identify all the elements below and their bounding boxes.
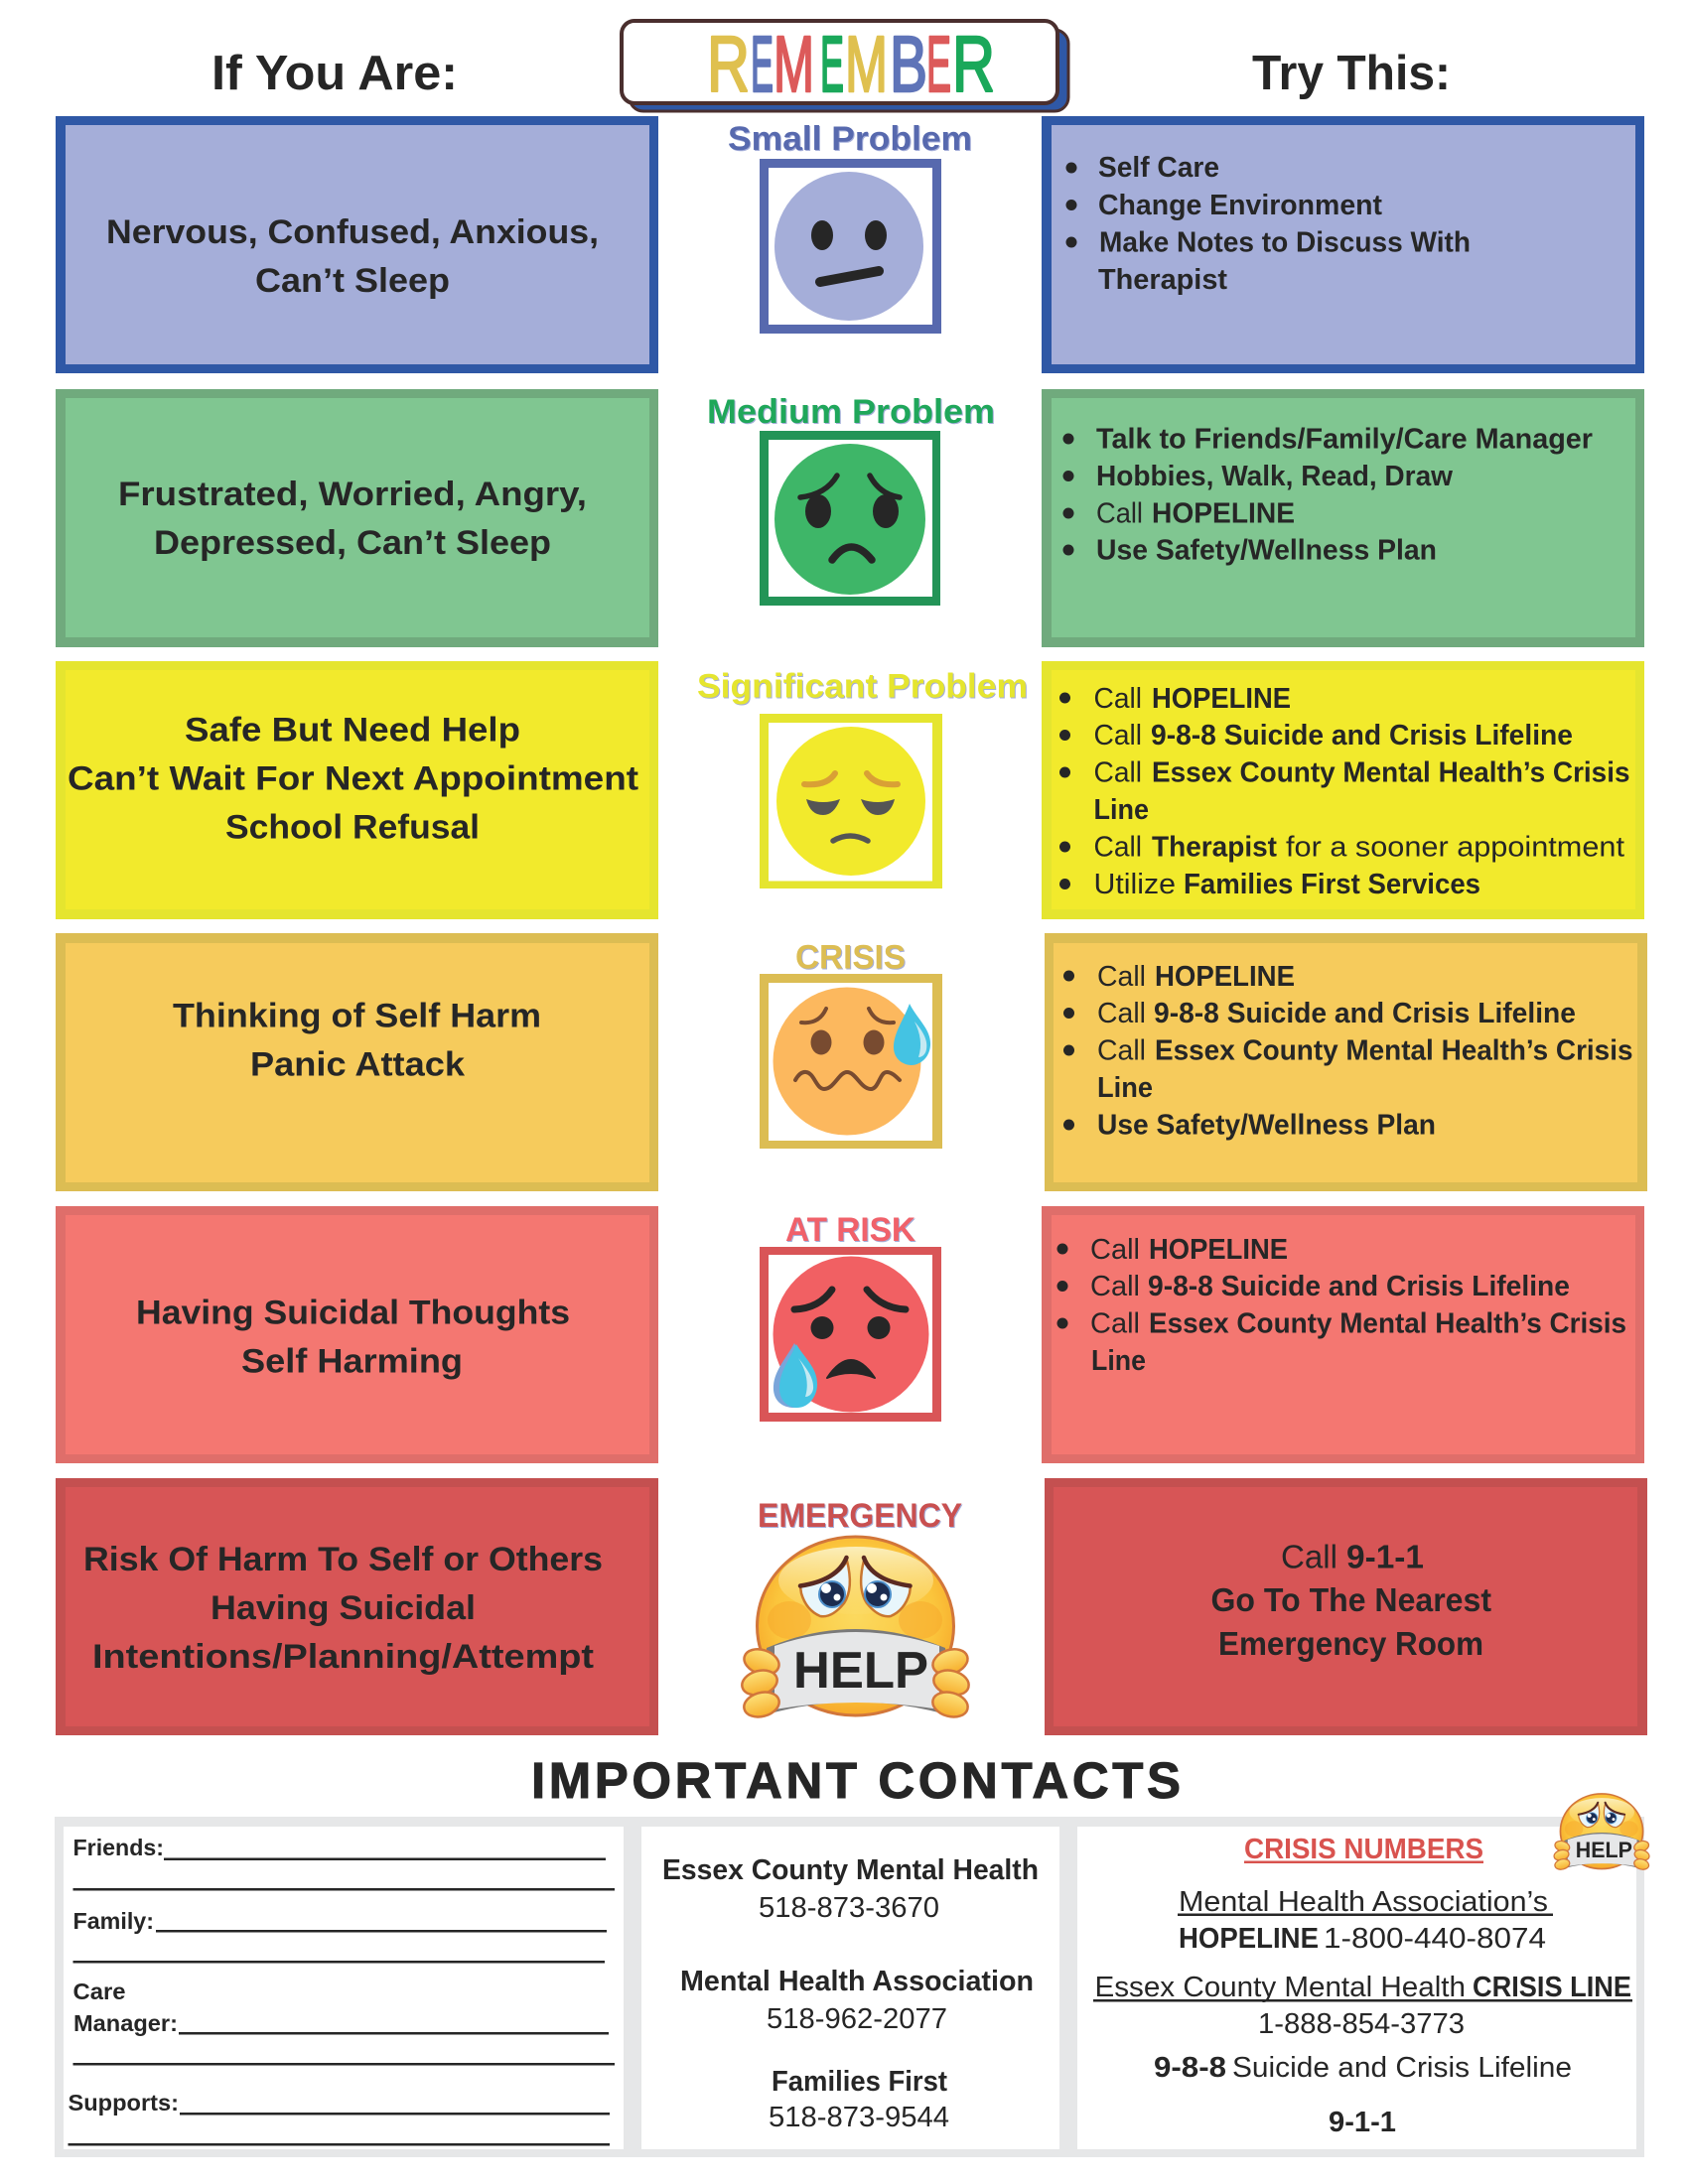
hotline: 9-8-8: 9-8-8	[1154, 2052, 1226, 2084]
field: care manager: Manager:	[73, 2010, 178, 2036]
banner title letters: R	[707, 20, 750, 108]
feelings text: Intentions/Planning/Attempt	[92, 1638, 594, 1676]
heading: Crisis Numbers: CRISIS NUMBERS	[1244, 1834, 1483, 1865]
contact: Families First: Families First	[772, 2066, 947, 2098]
feelings text	[173, 997, 541, 1084]
panel: emergency feelings	[56, 1478, 658, 1735]
action list: Call	[1096, 498, 1143, 530]
icon: neutral face	[760, 159, 941, 334]
feelings text: Can’t Sleep	[255, 262, 450, 300]
action list: Therapist	[1152, 832, 1277, 864]
contact: Families First: 518-873-9544	[769, 2102, 949, 2133]
panel: at risk feelings	[56, 1206, 658, 1463]
action list: HOPELINE	[1149, 1234, 1288, 1266]
icon: small help emoji	[1553, 1794, 1650, 1871]
icon: worried face	[760, 431, 940, 606]
feelings text	[136, 1295, 570, 1380]
field: care manager	[73, 1979, 615, 2065]
label: Significant Problem: Significant Problem	[697, 667, 1028, 705]
action list	[1056, 1234, 1626, 1377]
action list: HOPELINE	[1155, 961, 1295, 993]
action list: for a sooner appointment	[1286, 832, 1624, 864]
hotline: Essex County Crisis Line: 1-888-854-3773	[1258, 2008, 1465, 2040]
action list: Call	[1090, 1234, 1140, 1266]
action list: HOPELINE	[1152, 498, 1295, 530]
action list: Self Care	[1098, 152, 1219, 184]
icon: emoji holding help sign: HELP	[793, 1642, 928, 1700]
action text: Emergency Room	[1218, 1625, 1483, 1662]
feelings text: Nervous, Confused, Anxious,	[106, 213, 599, 251]
field: supports: Supports:	[68, 2090, 179, 2116]
action list: Call	[1094, 756, 1142, 788]
action list: HOPELINE	[1152, 683, 1291, 715]
panel: contacts background	[55, 1817, 1644, 2157]
action text: Go To The Nearest	[1211, 1581, 1491, 1618]
action list: Use Safety/Wellness Plan	[1097, 1110, 1436, 1142]
feelings text: Having Suicidal Thoughts	[136, 1295, 570, 1332]
panel: personal contacts form	[64, 1827, 624, 2149]
feelings text	[68, 711, 638, 846]
action list: Therapist	[1098, 264, 1228, 296]
panel: small problem feelings	[56, 116, 658, 373]
action list: Line	[1091, 1345, 1146, 1377]
panel: significant problem actions	[1042, 661, 1644, 919]
action list: Hobbies, Walk, Read, Draw	[1096, 461, 1454, 492]
contact: Essex County Mental Health	[662, 1854, 1039, 1924]
action list: Call	[1097, 961, 1146, 993]
panel: small problem actions	[1042, 116, 1644, 373]
contact: Mental Health Association: Mental Health Association	[680, 1966, 1034, 1997]
action list: Call	[1094, 720, 1142, 751]
action list: Talk to Friends/Family/Care Manager	[1096, 423, 1593, 455]
action text: Call	[1281, 1539, 1337, 1574]
hotline: 9-1-1: 9-1-1	[1329, 2107, 1396, 2138]
panel: medium problem actions	[1042, 389, 1644, 647]
feelings text	[106, 213, 599, 300]
icon: distressed face with tear	[760, 1247, 941, 1422]
hotline: Essex County Crisis Line: Essex County Mental Health	[1094, 1972, 1466, 2003]
action list: Essex County Mental Health’s Crisis	[1155, 1034, 1632, 1066]
feelings text: Depressed, Can’t Sleep	[154, 524, 551, 562]
feelings text: Risk Of Harm To Self or Others	[83, 1541, 603, 1578]
action list: 9-8-8 Suicide and Crisis Lifeline	[1148, 1271, 1570, 1302]
action list: Line	[1094, 794, 1149, 826]
action list: Use Safety/Wellness Plan	[1096, 534, 1437, 566]
icon: emoji holding help sign	[740, 1537, 971, 1720]
banner: REMEMBER	[622, 20, 1068, 111]
action list	[1063, 961, 1632, 1142]
icon: anxious face with sweat drop	[760, 974, 942, 1149]
feelings text: Safe But Need Help	[185, 711, 520, 749]
panel: significant problem feelings	[56, 661, 658, 919]
hotline: Essex County Crisis Line: CRISIS LINE	[1473, 1972, 1631, 2003]
title: Important Contacts: IMPORTANT CONTACTS	[531, 1752, 1181, 1809]
panel: crisis numbers	[1077, 1827, 1636, 2149]
banner title letters: B	[890, 20, 927, 108]
action list: Line	[1097, 1072, 1153, 1104]
action list	[1062, 423, 1593, 566]
field: care manager: Care	[73, 1979, 125, 2004]
contact: Essex County Mental Health: Essex County Mental Health	[662, 1854, 1039, 1886]
action list: 9-8-8 Suicide and Crisis Lifeline	[1154, 998, 1576, 1029]
action list: Change Environment	[1098, 190, 1382, 221]
hotline: Essex County Crisis Line	[1093, 1972, 1632, 2040]
feelings text: Can’t Wait For Next Appointment	[68, 760, 638, 798]
field: family: Family:	[73, 1908, 154, 1934]
feelings text: Panic Attack	[250, 1046, 465, 1084]
banner title letters: R	[952, 20, 995, 108]
action list: Utilize	[1094, 869, 1176, 900]
hotline: Mental Health Association Hopeline: Mental Health Association’s	[1179, 1886, 1548, 1918]
icon: sad face with closed eyes	[760, 714, 942, 888]
heading: If You Are: If You Are:	[211, 47, 458, 100]
contact: Mental Health Association	[680, 1966, 1034, 2035]
panel: at risk actions	[1042, 1206, 1644, 1463]
feelings text: Self Harming	[241, 1342, 463, 1380]
banner title letters: M	[845, 20, 888, 108]
icon: small help emoji: HELP	[1576, 1838, 1632, 1862]
action list: 9-8-8 Suicide and Crisis Lifeline	[1151, 720, 1573, 751]
action text: 9-1-1	[1346, 1539, 1424, 1574]
action list: Make Notes to Discuss With	[1099, 226, 1471, 258]
action list: Call	[1094, 683, 1142, 715]
heading: Try This: Try This:	[1252, 47, 1451, 100]
banner title letters	[707, 20, 995, 108]
feelings text: School Refusal	[225, 808, 480, 846]
action list: Call	[1090, 1271, 1140, 1302]
feelings text: Frustrated, Worried, Angry,	[118, 476, 587, 513]
action list: Essex County Mental Health’s Crisis	[1149, 1308, 1626, 1340]
action text	[1211, 1539, 1491, 1662]
panel: agency phone numbers	[641, 1827, 1059, 2149]
hotline: 9-8-8: Suicide and Crisis Lifeline	[1232, 2052, 1572, 2084]
label: EMERGENCY: EMERGENCY	[758, 1497, 962, 1535]
banner title letters: E	[820, 20, 844, 108]
label: Small Problem: Small Problem	[728, 120, 972, 158]
label: AT RISK: AT RISK	[785, 1211, 915, 1249]
action list	[1059, 683, 1630, 900]
action list: Call	[1090, 1308, 1140, 1340]
field: friends: Friends:	[73, 1835, 164, 1860]
action list: Call	[1094, 832, 1142, 864]
banner title letters: E	[926, 20, 951, 108]
label: CRISIS: CRISIS	[795, 939, 906, 977]
contact: Mental Health Association: 518-962-2077	[767, 2003, 947, 2035]
hotline: Mental Health Association Hopeline: 1-800-440-8074	[1324, 1923, 1546, 1955]
banner title letters: M	[774, 20, 814, 108]
action list: Essex County Mental Health’s Crisis	[1152, 756, 1630, 788]
panel: crisis actions	[1045, 933, 1647, 1191]
panel: crisis feelings	[56, 933, 658, 1191]
hotline: Mental Health Association Hopeline	[1178, 1886, 1553, 1955]
action list	[1066, 152, 1471, 296]
contact: Families First	[769, 2066, 949, 2133]
feelings text	[118, 476, 587, 562]
feelings text	[83, 1541, 603, 1676]
action list: Call	[1097, 1034, 1146, 1066]
action list: Call	[1097, 998, 1146, 1029]
action list: Families First Services	[1184, 869, 1480, 900]
hotline: Mental Health Association Hopeline: HOPELINE	[1179, 1923, 1319, 1955]
panel: medium problem feelings	[56, 389, 658, 647]
feelings text: Having Suicidal	[211, 1589, 476, 1627]
panel: emergency actions	[1045, 1478, 1647, 1735]
contact: Essex County Mental Health: 518-873-3670	[759, 1892, 939, 1924]
banner title letters: E	[751, 20, 774, 108]
feelings text: Thinking of Self Harm	[173, 997, 541, 1034]
label: Medium Problem: Medium Problem	[707, 393, 995, 431]
